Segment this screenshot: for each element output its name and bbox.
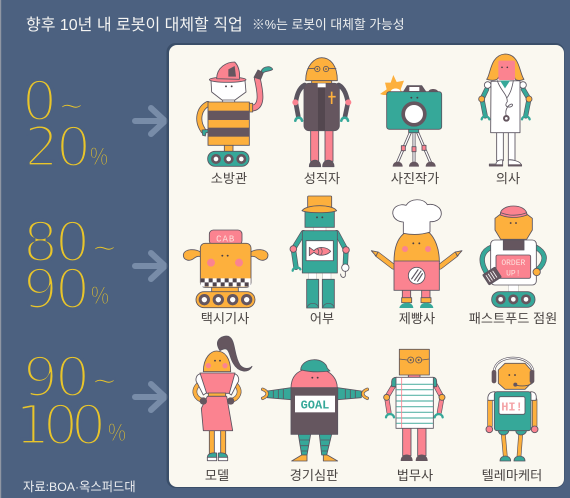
range: 0 to 20 percent — [22, 69, 108, 179]
robot: telemarketer — [482, 358, 542, 483]
robot: taxi driver: CAB — [216, 235, 235, 245]
arrow: first row — [135, 108, 165, 134]
robot: model — [195, 336, 252, 483]
robot: telemarketer: HI! — [501, 400, 523, 414]
robot: taxi driver — [183, 230, 268, 326]
label: 제빵사 — [399, 311, 435, 326]
range: 0 to 20 percent: 0 — [22, 69, 54, 133]
robot: referee: GOAL — [301, 399, 329, 413]
label: 모델 — [205, 468, 229, 483]
robot: baker — [371, 200, 462, 326]
robot: legal clerk — [384, 349, 445, 483]
range: 0 to 20 percent: % — [90, 143, 108, 171]
panel: robot occupations — [169, 45, 564, 487]
range: 80 to 90 percent: 90 — [23, 257, 87, 321]
label: 성직자 — [304, 171, 340, 186]
range: 90 to 100 percent: 100 — [15, 393, 103, 457]
subtitle note: ※%는 로봇이 대체할 가능성 — [252, 17, 405, 32]
arrow: third row — [135, 384, 165, 410]
range: 0 to 20 percent: ~ — [58, 86, 85, 124]
label: 법무사 — [397, 468, 433, 483]
robot: doctor — [479, 54, 532, 186]
label: 사진작가 — [391, 171, 439, 186]
range: 90 to 100 percent: ~ — [91, 361, 118, 399]
label: 소방관 — [211, 171, 247, 186]
robot: priest — [292, 58, 351, 186]
robot: fisherman — [290, 196, 349, 326]
range: 80 to 90 percent: 80 — [23, 210, 87, 274]
label: 의사 — [496, 171, 520, 186]
range: 90 to 100 percent — [15, 345, 126, 457]
range: 90 to 100 percent: % — [108, 419, 126, 447]
label: 패스트푸드 점원 — [469, 311, 557, 326]
label: 경기심판 — [290, 468, 338, 483]
robot: fast food worker — [469, 206, 557, 326]
range: 80 to 90 percent: % — [91, 282, 109, 310]
robot: fast food worker: ORDER — [501, 259, 526, 268]
title: 향후 10년 내 로봇이 대체할 직업 — [26, 16, 243, 34]
source: 자료:BOA·옥스퍼드대 — [23, 480, 136, 494]
range: 90 to 100 percent: 90 — [23, 345, 87, 409]
range: 80 to 90 percent — [23, 210, 118, 321]
arrow: second row — [135, 253, 165, 279]
label: 텔레마케터 — [482, 468, 542, 483]
label: 택시기사 — [201, 311, 249, 326]
robot: photographer — [380, 75, 442, 186]
robot: firefighter — [199, 62, 273, 186]
robot: referee — [263, 360, 367, 483]
range: 80 to 90 percent: ~ — [91, 228, 118, 266]
range: 0 to 20 percent: 20 — [24, 115, 88, 179]
robot: fast food worker: UP! — [506, 269, 521, 278]
label: 어부 — [310, 311, 334, 326]
